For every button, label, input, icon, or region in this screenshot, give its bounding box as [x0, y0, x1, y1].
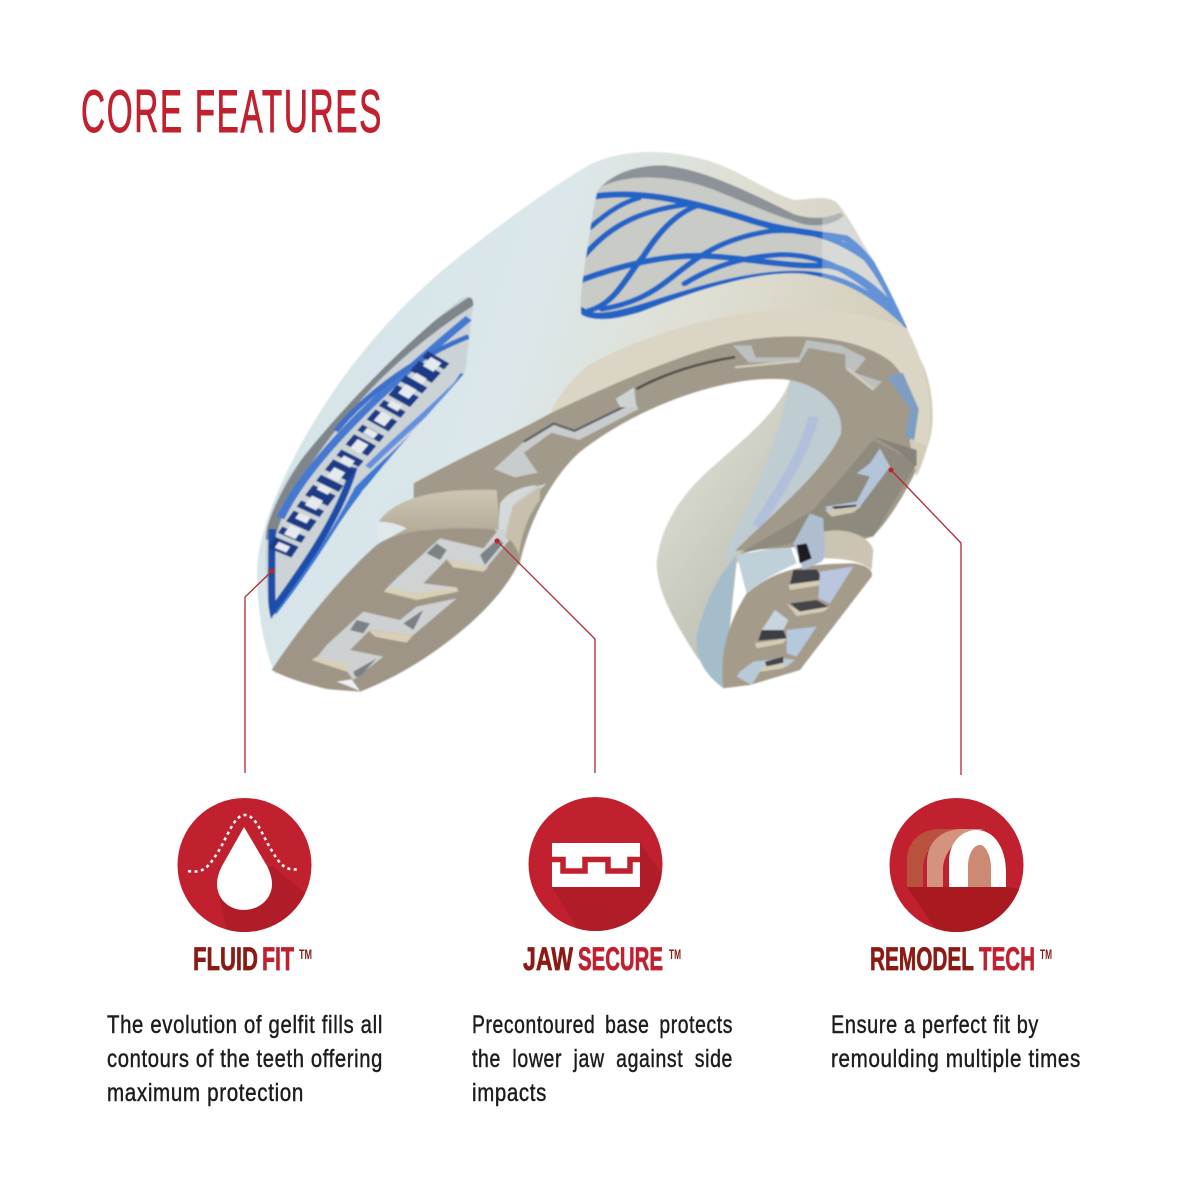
- feature: remodel tech: [831, 798, 1081, 1073]
- leader dots: [270, 468, 894, 574]
- description: remodel tech: Ensure a perfect fit by: [831, 1011, 1039, 1039]
- underside tan band with teeth: [377, 333, 922, 565]
- arch teeth grooves: [492, 340, 919, 544]
- label: remodel tech: TECH: [979, 941, 1035, 977]
- description: fluid fit: The evolution of gelfit fills all: [107, 1011, 383, 1039]
- leader line: remodel tech: [891, 470, 961, 775]
- back right limb of mouthguard: [657, 380, 880, 688]
- feature: jaw secure: [472, 797, 733, 1107]
- description: jaw secure: [472, 1011, 733, 1107]
- left end pad with teeth: [272, 485, 540, 692]
- main outer body: [257, 152, 933, 674]
- label: fluid fit: TM: [299, 946, 312, 962]
- description: fluid fit: contours of the teeth offering: [107, 1045, 383, 1073]
- description: jaw secure: impacts: [472, 1079, 547, 1107]
- label: remodel tech: TM: [1040, 946, 1052, 962]
- leader line: fluid fit: [245, 571, 272, 773]
- feature: fluid fit: [107, 798, 383, 1107]
- icon: remodelling arches: [890, 798, 1024, 932]
- label: remodel tech: REMODEL: [870, 941, 974, 977]
- title: CORE FEATURES: [81, 78, 383, 145]
- right end pad with teeth: [722, 437, 917, 688]
- label: jaw secure: [523, 941, 681, 977]
- left window with blue strands and logo: [265, 297, 473, 621]
- icon: droplet: [178, 798, 312, 932]
- description: remodel tech: [831, 1011, 1081, 1073]
- description: fluid fit: maximum protection: [107, 1079, 304, 1107]
- leader line: jaw secure: [497, 541, 595, 773]
- label: fluid fit: FLUID: [193, 941, 258, 977]
- label: fluid fit: FIT: [262, 941, 294, 977]
- label: jaw secure: SECURE: [578, 941, 663, 977]
- label: jaw secure: TM: [669, 946, 681, 962]
- description: jaw secure: the lower jaw against side: [472, 1045, 733, 1073]
- mouthguard illustration: [257, 152, 933, 692]
- description: fluid fit: [107, 1011, 383, 1107]
- right window with blue strands: [580, 164, 908, 330]
- icon: teeth profile: [528, 797, 662, 931]
- description: jaw secure: Precontoured base protects: [472, 1011, 733, 1039]
- description: remodel tech: remoulding multiple times: [831, 1045, 1081, 1073]
- label: jaw secure: JAW: [523, 941, 574, 977]
